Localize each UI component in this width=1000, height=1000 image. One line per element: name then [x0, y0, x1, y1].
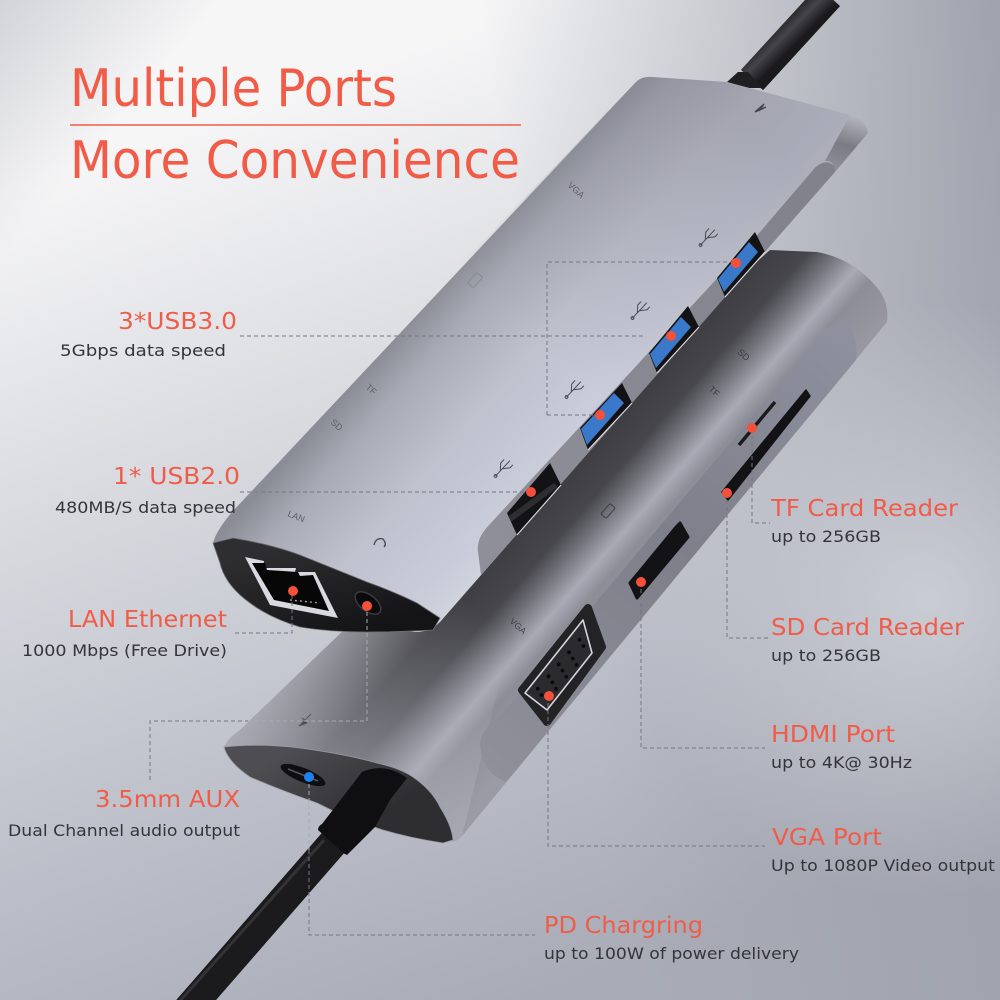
label: HDMI Port — [771, 722, 912, 772]
VGA port — [522, 608, 602, 722]
label: 3*USB3.0: 5Gbps data speed — [60, 341, 226, 360]
label: VGA Port: Up to 1080P Video output — [771, 856, 995, 875]
label: PD Chargring: PD Chargring — [544, 913, 703, 939]
label: 3*USB3.0 — [60, 309, 237, 360]
label: HDMI Port: HDMI Port — [771, 722, 895, 748]
label: VGA Port: VGA Port — [772, 825, 882, 851]
lower hub end shading — [224, 600, 520, 841]
USB 2.0 port — [507, 463, 561, 535]
TF slot — [739, 402, 775, 445]
label: TF Card Reader: TF Card Reader — [770, 496, 959, 522]
upper hub shading — [330, 77, 868, 475]
lower hub markings: SD — [736, 347, 752, 363]
upper end face — [213, 538, 440, 632]
upper hub — [213, 77, 868, 632]
label: 3.5mm AUX: 3.5mm AUX — [95, 787, 240, 813]
label: LAN Ethernet: 1000 Mbps (Free Drive) — [22, 641, 227, 660]
title: Multiple Ports — [70, 59, 397, 119]
upper hub markings: VGA — [566, 180, 586, 200]
label: 1* USB2.0 — [55, 464, 240, 517]
port marker dots — [288, 258, 757, 782]
label: LAN Ethernet: LAN Ethernet — [68, 607, 227, 633]
USB icon 1 — [491, 457, 513, 480]
lower end face — [224, 745, 453, 843]
3.5mm AUX jack — [351, 587, 385, 619]
label: LAN Ethernet — [22, 607, 227, 660]
upper hub body — [213, 77, 868, 632]
upper hub markings: LAN — [286, 509, 306, 524]
title: More Convenience — [70, 131, 520, 191]
upper hub markings — [286, 104, 766, 547]
label: TF Card Reader: up to 256GB — [771, 527, 881, 546]
label: 3*USB3.0: 3*USB3.0 — [118, 309, 237, 335]
label: PD Chargring — [544, 913, 799, 963]
lower hub — [224, 250, 887, 843]
label: SD Card Reader — [771, 615, 965, 665]
label: VGA Port — [771, 825, 995, 875]
upper hub markings: TF — [364, 382, 379, 397]
dashed leader lines — [150, 262, 770, 935]
USB icon 4 — [696, 226, 718, 249]
title — [70, 59, 521, 191]
end band of upper hub — [825, 115, 868, 172]
USB icon 3 — [628, 299, 650, 322]
lower hub markings: VGA — [508, 616, 528, 636]
RJ45 LAN port — [245, 557, 338, 618]
label: 1* USB2.0: 480MB/S data speed — [55, 498, 236, 517]
upper hub markings: SD — [329, 417, 345, 433]
label: PD Chargring: up to 100W of power delivery — [544, 944, 799, 963]
USB 3.0 port 1 — [580, 383, 632, 450]
HDMI port — [630, 523, 688, 598]
label: 1* USB2.0: 1* USB2.0 — [113, 464, 240, 490]
label: TF Card Reader — [770, 496, 959, 546]
USB 3.0 port 2 — [649, 306, 699, 373]
lower hub markings — [299, 347, 752, 726]
USB icon 2 — [562, 378, 584, 401]
USB 3.0 port 3 — [717, 232, 765, 297]
label: HDMI Port: up to 4K@ 30Hz — [771, 753, 912, 772]
SD slot — [722, 390, 810, 500]
USB-C PD port — [278, 760, 328, 790]
PD cable — [170, 768, 407, 1000]
label: 3.5mm AUX — [8, 787, 240, 840]
top cable — [727, 0, 829, 88]
label: 3.5mm AUX: Dual Channel audio output — [8, 821, 240, 840]
label: SD Card Reader: SD Card Reader — [771, 615, 965, 641]
upper USB strip — [478, 162, 835, 575]
lower hub markings: TF — [707, 384, 722, 399]
lower port strip — [480, 322, 856, 782]
label: SD Card Reader: up to 256GB — [771, 646, 881, 665]
lower hub body — [224, 250, 887, 841]
